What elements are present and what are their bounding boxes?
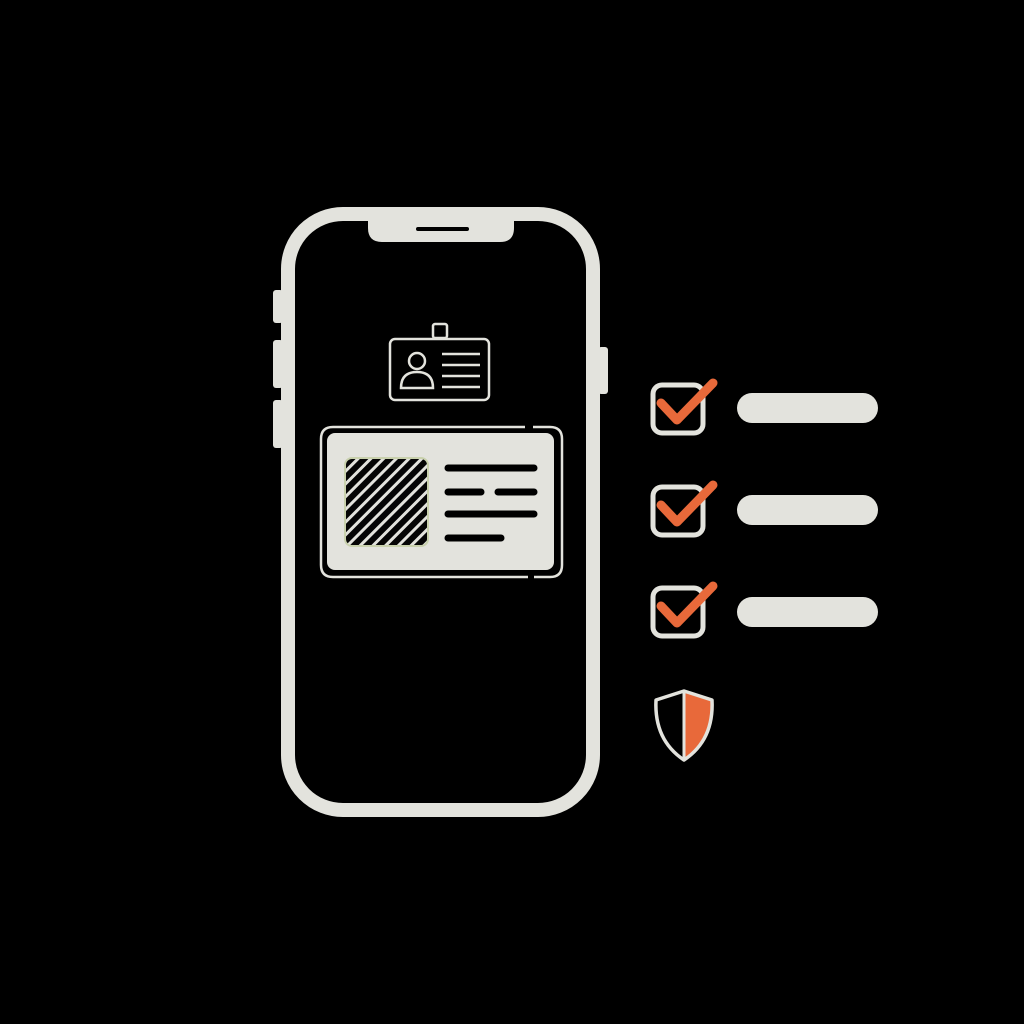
notch [368,214,514,242]
checklist item 1 [653,383,878,433]
checklist item 2 [653,485,878,535]
phone side buttons [273,290,608,448]
phone body outline [288,214,593,810]
checklist item 3 [653,586,878,636]
photo [345,458,428,546]
icon: ID badge [390,324,489,400]
text lines [448,468,534,538]
icon: shield [656,691,712,760]
speaker [418,227,467,231]
card frame [321,427,562,577]
ID card [321,427,562,577]
card body [327,433,554,570]
phone [273,214,608,810]
